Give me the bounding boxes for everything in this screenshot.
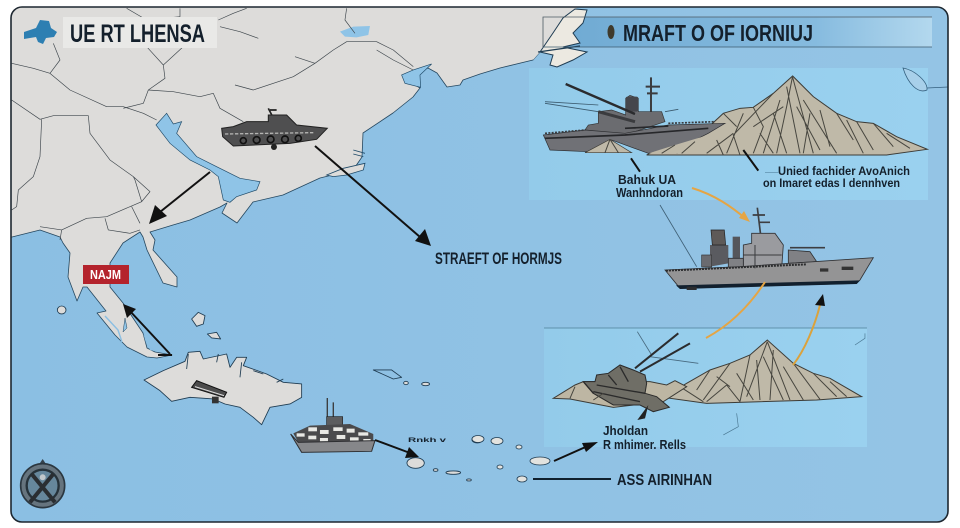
channel beside the long peninsula (105, 316, 122, 342)
warship (543, 77, 725, 153)
title bar: top right: MRAFT O OF IORNIUJ (623, 20, 813, 46)
gulf and inland water (156, 26, 432, 202)
cargo ship (291, 398, 375, 452)
label: Strait of Hormuz: STRAEFT OF HORMJS (435, 249, 562, 268)
mountain range (663, 333, 865, 435)
arrow: gulf to coast (149, 172, 210, 224)
arrow: to strait label (315, 146, 431, 246)
ship on mainland (222, 108, 327, 150)
panel: missile battery and mountain: R mhimer. Rells (603, 437, 686, 452)
callout text: Bahuk UA (618, 172, 677, 187)
panel: warship and mountain (529, 68, 948, 200)
coastline islets (327, 150, 365, 177)
panel: warship and mountain: Unied fachider AvoAnich (778, 164, 910, 178)
panel: missile battery and mountain (544, 328, 867, 452)
icon: blue emblem (24, 20, 57, 44)
emblem: crossed tools badge (21, 459, 65, 508)
land: islands (57, 306, 483, 481)
title box: top left: UE RT LHENSA (70, 20, 205, 48)
tiny island label: Rnkh v (408, 438, 447, 444)
ship on island (192, 381, 227, 403)
island at right edge (903, 68, 948, 91)
panel: warship and mountain: on Imaret edas I dennhven (763, 176, 900, 190)
outer islands on the right (472, 436, 550, 482)
warship: centre right (660, 205, 873, 290)
arrows (123, 146, 825, 461)
arrow: mountain to warship (793, 294, 825, 365)
mountain range (647, 76, 927, 155)
battery caption: Jholdan (603, 423, 648, 438)
label: red tag: NAJM (90, 267, 121, 282)
arrow: orange to warship (692, 188, 750, 222)
arrow: orange battery to warship (706, 282, 765, 338)
title box: top left (24, 17, 217, 48)
arrow: cargo ship to islet (375, 440, 419, 458)
title bar: top right (533, 7, 932, 67)
large island (144, 351, 302, 425)
land: mainland (0, 0, 578, 358)
panel: warship and mountain: Wanhndoran (616, 185, 683, 200)
arrow: islet to battery caption (554, 442, 598, 461)
label: AGS: ASS AIRINHAN (617, 472, 712, 489)
country borders (12, 8, 413, 240)
arrow: to peninsula (123, 304, 172, 355)
missile launcher (553, 332, 698, 420)
callout lines (631, 150, 758, 172)
promontory over the bar (533, 7, 578, 60)
label: red tag (83, 265, 129, 284)
